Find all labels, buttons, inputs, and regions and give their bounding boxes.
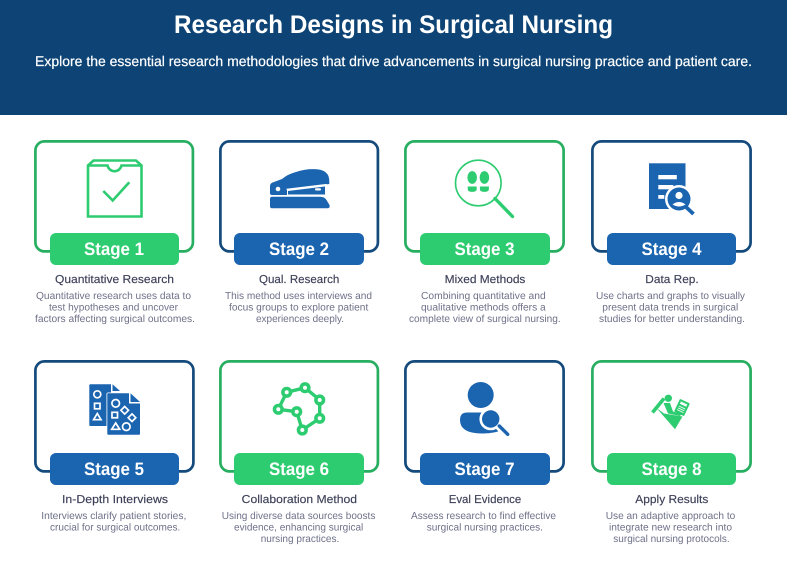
card title: Data Rep. xyxy=(645,274,699,286)
panel: stage 5 in-depth interviews xyxy=(35,361,193,534)
card frame xyxy=(220,141,378,251)
stage badge: Stage 6 xyxy=(269,459,329,479)
stage badge xyxy=(50,233,179,265)
card description: Interviews clarify patient stories, xyxy=(41,511,186,522)
stage badge: Stage 2 xyxy=(269,239,329,259)
panel: stage 3 mixed methods xyxy=(405,141,564,325)
card description: evidence, enhancing surgical xyxy=(234,522,363,534)
card frame xyxy=(405,141,564,251)
card description: integrate new research into xyxy=(609,522,732,534)
stage badge: Stage 1 xyxy=(84,239,144,259)
icon: connected network nodes xyxy=(273,382,325,436)
icon: stapler xyxy=(270,169,330,208)
panel: stage 1 quantitative research xyxy=(35,141,195,325)
card description: qualitative methods offers a xyxy=(421,302,546,314)
card description: surgical nursing protocols. xyxy=(613,534,730,545)
panel: stage 4 data representation xyxy=(592,141,751,325)
icon: folder with check mark xyxy=(88,160,142,216)
panel: stage 2 qualitative research xyxy=(220,141,378,325)
panel: stage 8 apply results xyxy=(592,361,751,545)
card description: factors affecting surgical outcomes. xyxy=(35,314,195,325)
card description xyxy=(596,291,746,325)
panel: stage 7 eval evidence xyxy=(405,361,564,534)
card description: nursing practices. xyxy=(261,534,339,545)
card frame xyxy=(592,141,751,251)
card description: Assess research to find effective xyxy=(411,511,556,522)
icon: patient in bed with calculator xyxy=(652,395,690,429)
stage badge xyxy=(234,453,364,485)
stage badge xyxy=(607,453,736,485)
card description: surgical nursing practices. xyxy=(427,522,543,534)
icon: person with magnifier xyxy=(460,382,508,434)
card title: Eval Evidence xyxy=(449,494,521,506)
card frame xyxy=(35,141,193,251)
card description: experiences deeply. xyxy=(256,314,344,325)
card frame xyxy=(405,361,564,471)
card description: crucial for surgical outcomes. xyxy=(50,522,180,534)
card title: Apply Results xyxy=(635,494,709,506)
card frame xyxy=(592,361,751,471)
card description: This method uses interviews and xyxy=(225,291,372,302)
card description xyxy=(35,291,195,325)
header band xyxy=(0,0,787,115)
card description xyxy=(409,291,561,325)
card description: test hypotheses and uncover xyxy=(49,302,179,314)
icon: document with magnifier xyxy=(649,163,694,214)
card description: present data trends in surgical xyxy=(602,302,738,314)
card description: focus groups to explore patient xyxy=(229,302,368,314)
stage badge: Stage 5 xyxy=(84,459,144,479)
card description xyxy=(225,291,372,325)
icon: magnifier with footprints xyxy=(456,160,512,216)
stage badge: Stage 3 xyxy=(454,239,514,259)
subtitle: Explore the essential research methodologies that drive advancements in surgical nursing practice and patient care. xyxy=(35,53,752,69)
card frame xyxy=(220,361,378,471)
card description xyxy=(222,511,375,545)
card description: studies for better understanding. xyxy=(599,314,745,325)
stage badge: Stage 8 xyxy=(642,459,702,479)
card description: Using diverse data sources boosts xyxy=(222,511,375,522)
icon: documents with shapes xyxy=(89,384,140,435)
card title: Collaboration Method xyxy=(242,494,357,506)
stage badge xyxy=(234,233,364,265)
card description: Use an adaptive approach to xyxy=(606,511,736,522)
stage badge: Stage 7 xyxy=(454,459,514,479)
card description: Use charts and graphs to visually xyxy=(596,291,746,302)
card title: Mixed Methods xyxy=(445,274,526,286)
stage badge xyxy=(50,453,179,485)
card description xyxy=(41,511,186,534)
stage badge xyxy=(607,233,736,265)
panel: stage 6 collaboration method xyxy=(220,361,378,545)
card title: Qual. Research xyxy=(259,274,339,286)
stage badge xyxy=(420,453,550,485)
card title: Quantitative Research xyxy=(55,274,174,286)
stage badge xyxy=(420,233,550,265)
card description: Quantitative research uses data to xyxy=(36,291,191,302)
stage badge: Stage 4 xyxy=(642,239,702,259)
card description xyxy=(606,511,736,545)
card description: complete view of surgical nursing. xyxy=(409,314,561,325)
card title: In-Depth Interviews xyxy=(62,494,168,506)
card description: Combining quantitative and xyxy=(421,291,546,302)
card description xyxy=(411,511,556,534)
title: Research Designs in Surgical Nursing xyxy=(174,11,613,39)
card frame xyxy=(35,361,193,471)
